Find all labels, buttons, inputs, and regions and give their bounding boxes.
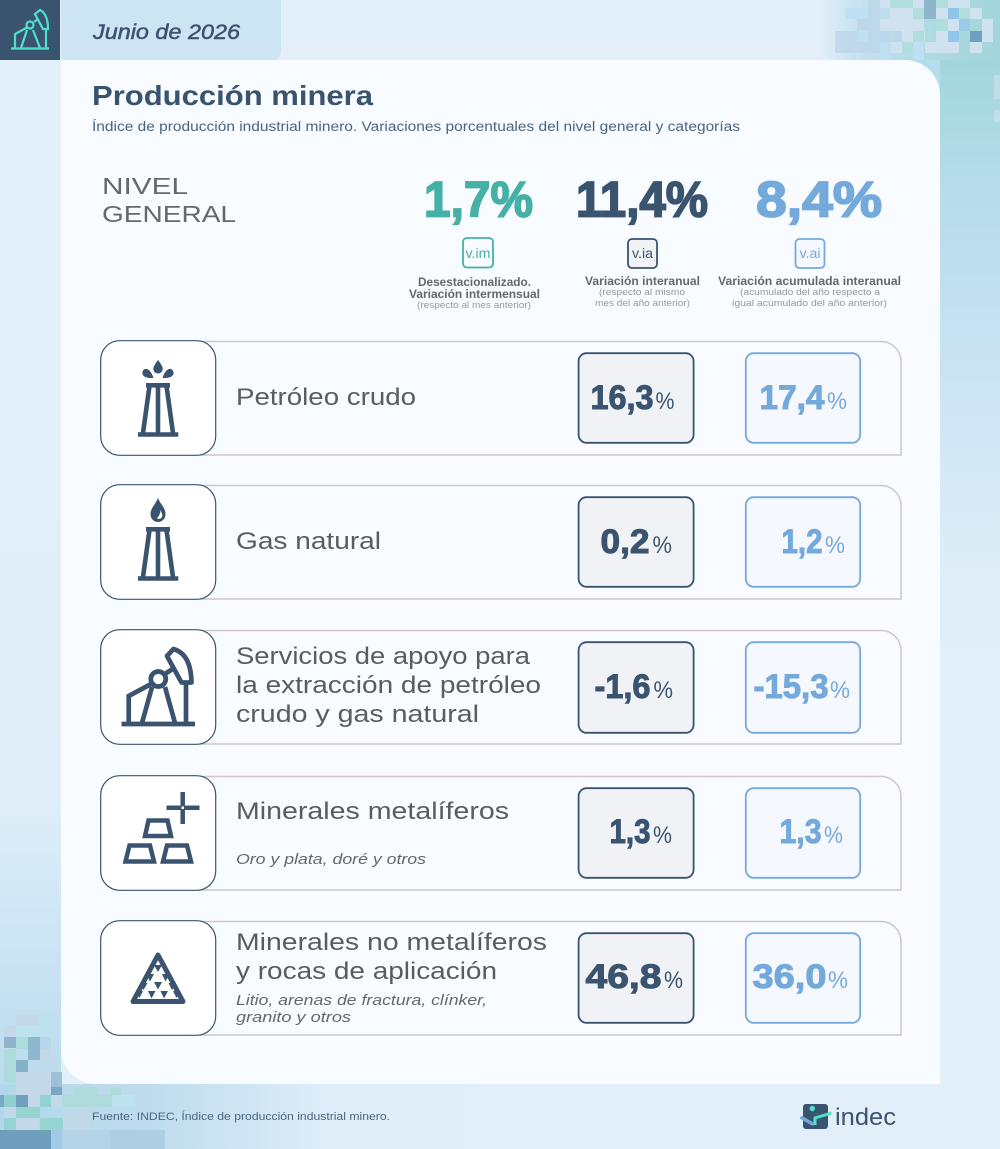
icon tile: gas	[101, 485, 216, 599]
kpi: v.ia: 11,4%	[576, 172, 708, 228]
caption: v.im: (respecto al mes anterior)	[417, 300, 531, 311]
value: v.ai: %	[828, 967, 848, 994]
row: minerales metalíferos	[101, 776, 901, 890]
label	[236, 643, 541, 728]
sublabel: granito y otros	[236, 1009, 352, 1026]
value: v.ai: %	[827, 388, 847, 415]
value: v.ai: %	[825, 532, 845, 559]
value: v.ia: 0,2	[600, 523, 650, 561]
value: v.ia	[579, 642, 694, 733]
value: v.ia: 46,8	[586, 958, 662, 996]
sublabel: Oro y plata, doré y otros	[236, 851, 427, 868]
label: Gas natural	[236, 528, 381, 555]
value: v.ai	[746, 933, 860, 1023]
value: v.ia: %	[654, 677, 673, 704]
caption: v.ia: Variación interanual	[585, 276, 700, 288]
heading: nivel general	[102, 173, 236, 227]
main white panel	[61, 60, 940, 1084]
icon: gas derrick with flame	[138, 498, 178, 578]
logo: indec: indec	[835, 1104, 896, 1131]
title: Producción minera	[92, 80, 373, 111]
caption: v.ai	[718, 276, 901, 309]
logo: indec	[800, 1104, 896, 1131]
row: gas natural	[101, 485, 901, 599]
header icon tile	[0, 0, 60, 60]
icon: gold bars and sparkle	[126, 792, 200, 862]
caption: v.ia	[585, 276, 700, 309]
value: v.ai: %	[824, 822, 843, 849]
value: v.ai: 36,0	[752, 958, 826, 996]
date tab: Junio de 2026	[92, 21, 240, 44]
caption: v.ia: (respecto al mismo	[599, 287, 685, 298]
label: Minerales metalíferos	[236, 798, 509, 825]
icon: pump jack	[122, 649, 195, 724]
value: v.ia: %	[653, 822, 672, 849]
badge: v.ai	[796, 239, 824, 268]
value: v.ai: 17,4	[760, 379, 825, 417]
subtitle: Índice de producción industrial minero. Variaciones porcentuales del nivel general y categorías	[92, 119, 740, 134]
date tab	[61, 0, 281, 60]
label	[236, 929, 547, 985]
caption: v.im: Desestacionalizado.	[418, 277, 531, 289]
badge: v.im: v.im	[466, 245, 490, 261]
row: petróleo crudo	[101, 341, 901, 455]
label: y rocas de aplicación	[236, 958, 497, 985]
value: v.ia: 1,3	[610, 813, 650, 851]
icon tile: metalíferos	[101, 776, 216, 890]
heading: nivel general: GENERAL	[102, 201, 236, 227]
label: Minerales no metalíferos	[236, 929, 547, 956]
row: minerales no metalíferos	[101, 921, 901, 1035]
caption: v.im: Variación intermensual	[409, 289, 540, 301]
value: v.ai: 1,3	[780, 813, 822, 851]
label: la extracción de petróleo	[236, 672, 541, 699]
icon: oil derrick	[138, 360, 178, 434]
sublabel: Litio, arenas de fractura, clínker,	[236, 992, 487, 1009]
source note: Fuente: INDEC, Índice de producción industrial minero.	[92, 1110, 390, 1123]
value: v.ia	[579, 933, 694, 1023]
kpi: v.ia	[576, 172, 708, 309]
value: v.ia	[579, 788, 694, 878]
icon tile: servicios	[101, 630, 216, 744]
caption: v.ia: mes del año anterior)	[595, 298, 690, 309]
value: v.ai	[746, 788, 860, 878]
caption: v.im	[409, 277, 540, 311]
heading: nivel general: NIVEL	[102, 173, 188, 199]
value: v.ia	[579, 353, 694, 443]
icon: mineral pile	[133, 955, 183, 1002]
icon tile: petróleo	[101, 341, 216, 455]
icon tile: no metalíferos	[101, 921, 216, 1035]
row: servicios de apoyo	[101, 630, 901, 744]
value: v.ia: %	[652, 532, 672, 559]
kpi: v.ai	[718, 172, 901, 309]
value: v.ia	[579, 497, 694, 587]
sublabel	[236, 992, 487, 1026]
value: v.ia: %	[664, 967, 683, 994]
label: crudo y gas natural	[236, 701, 479, 728]
badge: v.ai: v.ai	[800, 245, 820, 261]
value: v.ai: %	[830, 677, 850, 704]
value: v.ia: -1,6	[594, 668, 650, 706]
value: v.ai: -15,3	[754, 668, 828, 706]
kpi: v.im	[409, 172, 540, 311]
value: v.ai: 1,2	[782, 523, 822, 561]
caption: v.ai: igual acumulado del año anterior)	[732, 298, 887, 309]
value: v.ia: 16,3	[590, 379, 654, 417]
caption: v.ai: (acumulado del año respecto a	[740, 287, 881, 298]
value: v.ia: %	[656, 388, 674, 415]
value: v.ai	[746, 497, 860, 587]
label: Servicios de apoyo para	[236, 643, 531, 670]
value: v.ai	[746, 353, 860, 443]
kpi: v.ai: 8,4%	[756, 172, 882, 228]
badge: v.ia: v.ia	[632, 245, 653, 261]
icon: pump jack	[11, 10, 49, 48]
value: v.ai	[746, 642, 860, 733]
caption: v.ai: Variación acumulada interanual	[718, 276, 901, 288]
kpi: v.im: 1,7%	[424, 172, 533, 228]
label: Petróleo crudo	[236, 384, 416, 411]
